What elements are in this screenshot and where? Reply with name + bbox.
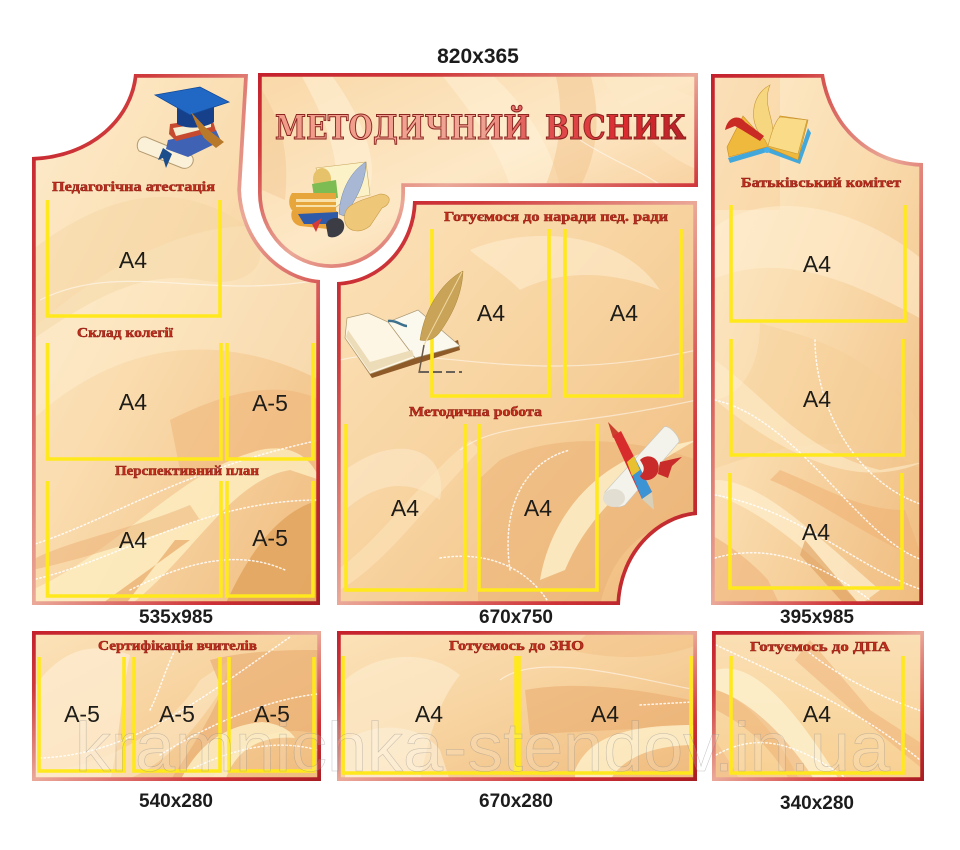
panel: lower left board 540x280 <box>30 629 323 783</box>
panel: left board 535x985 <box>30 70 325 610</box>
icon: quill feather <box>419 271 463 373</box>
title: ВІСНИК <box>545 108 686 148</box>
pocket: A4 upper left: A4 <box>477 300 505 326</box>
pocket: A4 lower <box>48 481 221 596</box>
pocket: A4 top <box>731 205 905 321</box>
heading: Педагогічна атестація: Педагогічна атестація <box>52 180 215 195</box>
heading: Склад колегії: Склад колегії <box>77 326 173 341</box>
panel: lower center board 670x280 <box>335 629 699 783</box>
pocket: A4 lower: A4 <box>119 527 147 553</box>
icon: open golden book with ribbon <box>725 85 811 164</box>
pocket: A4 right <box>519 656 691 773</box>
pocket: A-5 left: А-5 <box>64 701 100 727</box>
pocket: A4 lower left: A4 <box>391 495 419 521</box>
pocket: A-5 middle: А-5 <box>252 390 288 416</box>
pocket: A4 upper left <box>432 229 549 396</box>
panel: header board 820x365 <box>256 70 700 270</box>
pocket: A-5 centre <box>134 657 220 771</box>
pocket: A-5 lower <box>227 481 313 596</box>
heading: Методична робота: Методична робота <box>409 405 542 420</box>
panel: right board 395x985 <box>709 72 926 607</box>
heading: Перспективний план: Перспективний план <box>115 464 259 479</box>
pocket: A4 middle: A4 <box>803 386 831 412</box>
title: МЕТОДИЧНИЙ <box>275 105 530 148</box>
panel: center board 670x750 <box>335 199 699 609</box>
pocket: A-5 right: А-5 <box>254 701 290 727</box>
pocket: A4 right: A4 <box>591 701 619 727</box>
pocket: A4 upper right <box>565 229 681 396</box>
pocket: A4 lower right: A4 <box>524 495 552 521</box>
pocket: A4 lower right <box>479 424 597 590</box>
watermark: kramnichka-stendov.in.ua <box>75 708 890 786</box>
pocket: A4: A4 <box>803 701 831 727</box>
size caption: 340x280: 340x280 <box>780 793 854 814</box>
size caption: 670x280: 670x280 <box>479 791 553 812</box>
title <box>275 105 686 148</box>
size caption: 395x985: 395x985 <box>780 607 854 628</box>
heading: Батьківський комітет: Батьківський комітет <box>741 176 901 191</box>
panel: lower right board 340x280 <box>710 629 926 783</box>
size caption: 670x750: 670x750 <box>479 607 553 628</box>
pocket: A4 bottom <box>730 473 902 588</box>
icon: pencil and scroll <box>603 422 682 510</box>
icon: graduation cap, books and diploma <box>137 87 229 168</box>
heading: Готуємося до наради пед. ради: Готуємося до наради пед. ради <box>444 210 668 225</box>
heading: Сертифікація вчителів: Сертифікація вчителів <box>98 639 257 654</box>
pocket: A4 top: A4 <box>119 247 147 273</box>
pocket: A-5 left <box>39 657 124 771</box>
size caption: 535x985: 535x985 <box>139 607 213 628</box>
pocket: A-5 middle <box>227 343 313 459</box>
pocket: A4 top: A4 <box>803 251 831 277</box>
icon: open book <box>345 310 460 378</box>
icon: scrolls, books, quill and inkpot <box>289 162 389 237</box>
size caption: 820x365: 820x365 <box>437 45 519 68</box>
pocket: A4 upper right: A4 <box>610 300 638 326</box>
pocket: A4 left <box>343 656 516 773</box>
pocket: A-5 centre: А-5 <box>159 701 195 727</box>
pocket: A4 top <box>48 200 220 316</box>
heading: Готуємось до ЗНО: Готуємось до ЗНО <box>449 639 584 654</box>
pocket: A4 left: A4 <box>415 701 443 727</box>
pocket: A4 middle <box>48 343 221 459</box>
heading: Готуємось до ДПА: Готуємось до ДПА <box>750 640 891 655</box>
size caption: 540x280: 540x280 <box>139 791 213 812</box>
pocket: A4 middle: A4 <box>119 389 147 415</box>
pocket: A-5 right <box>229 657 314 771</box>
pocket: A4 <box>731 656 903 773</box>
pocket: A-5 lower: А-5 <box>252 525 288 551</box>
pocket: A4 middle <box>731 339 903 455</box>
pocket: A4 lower left <box>346 424 465 590</box>
pocket: A4 bottom: A4 <box>802 519 830 545</box>
